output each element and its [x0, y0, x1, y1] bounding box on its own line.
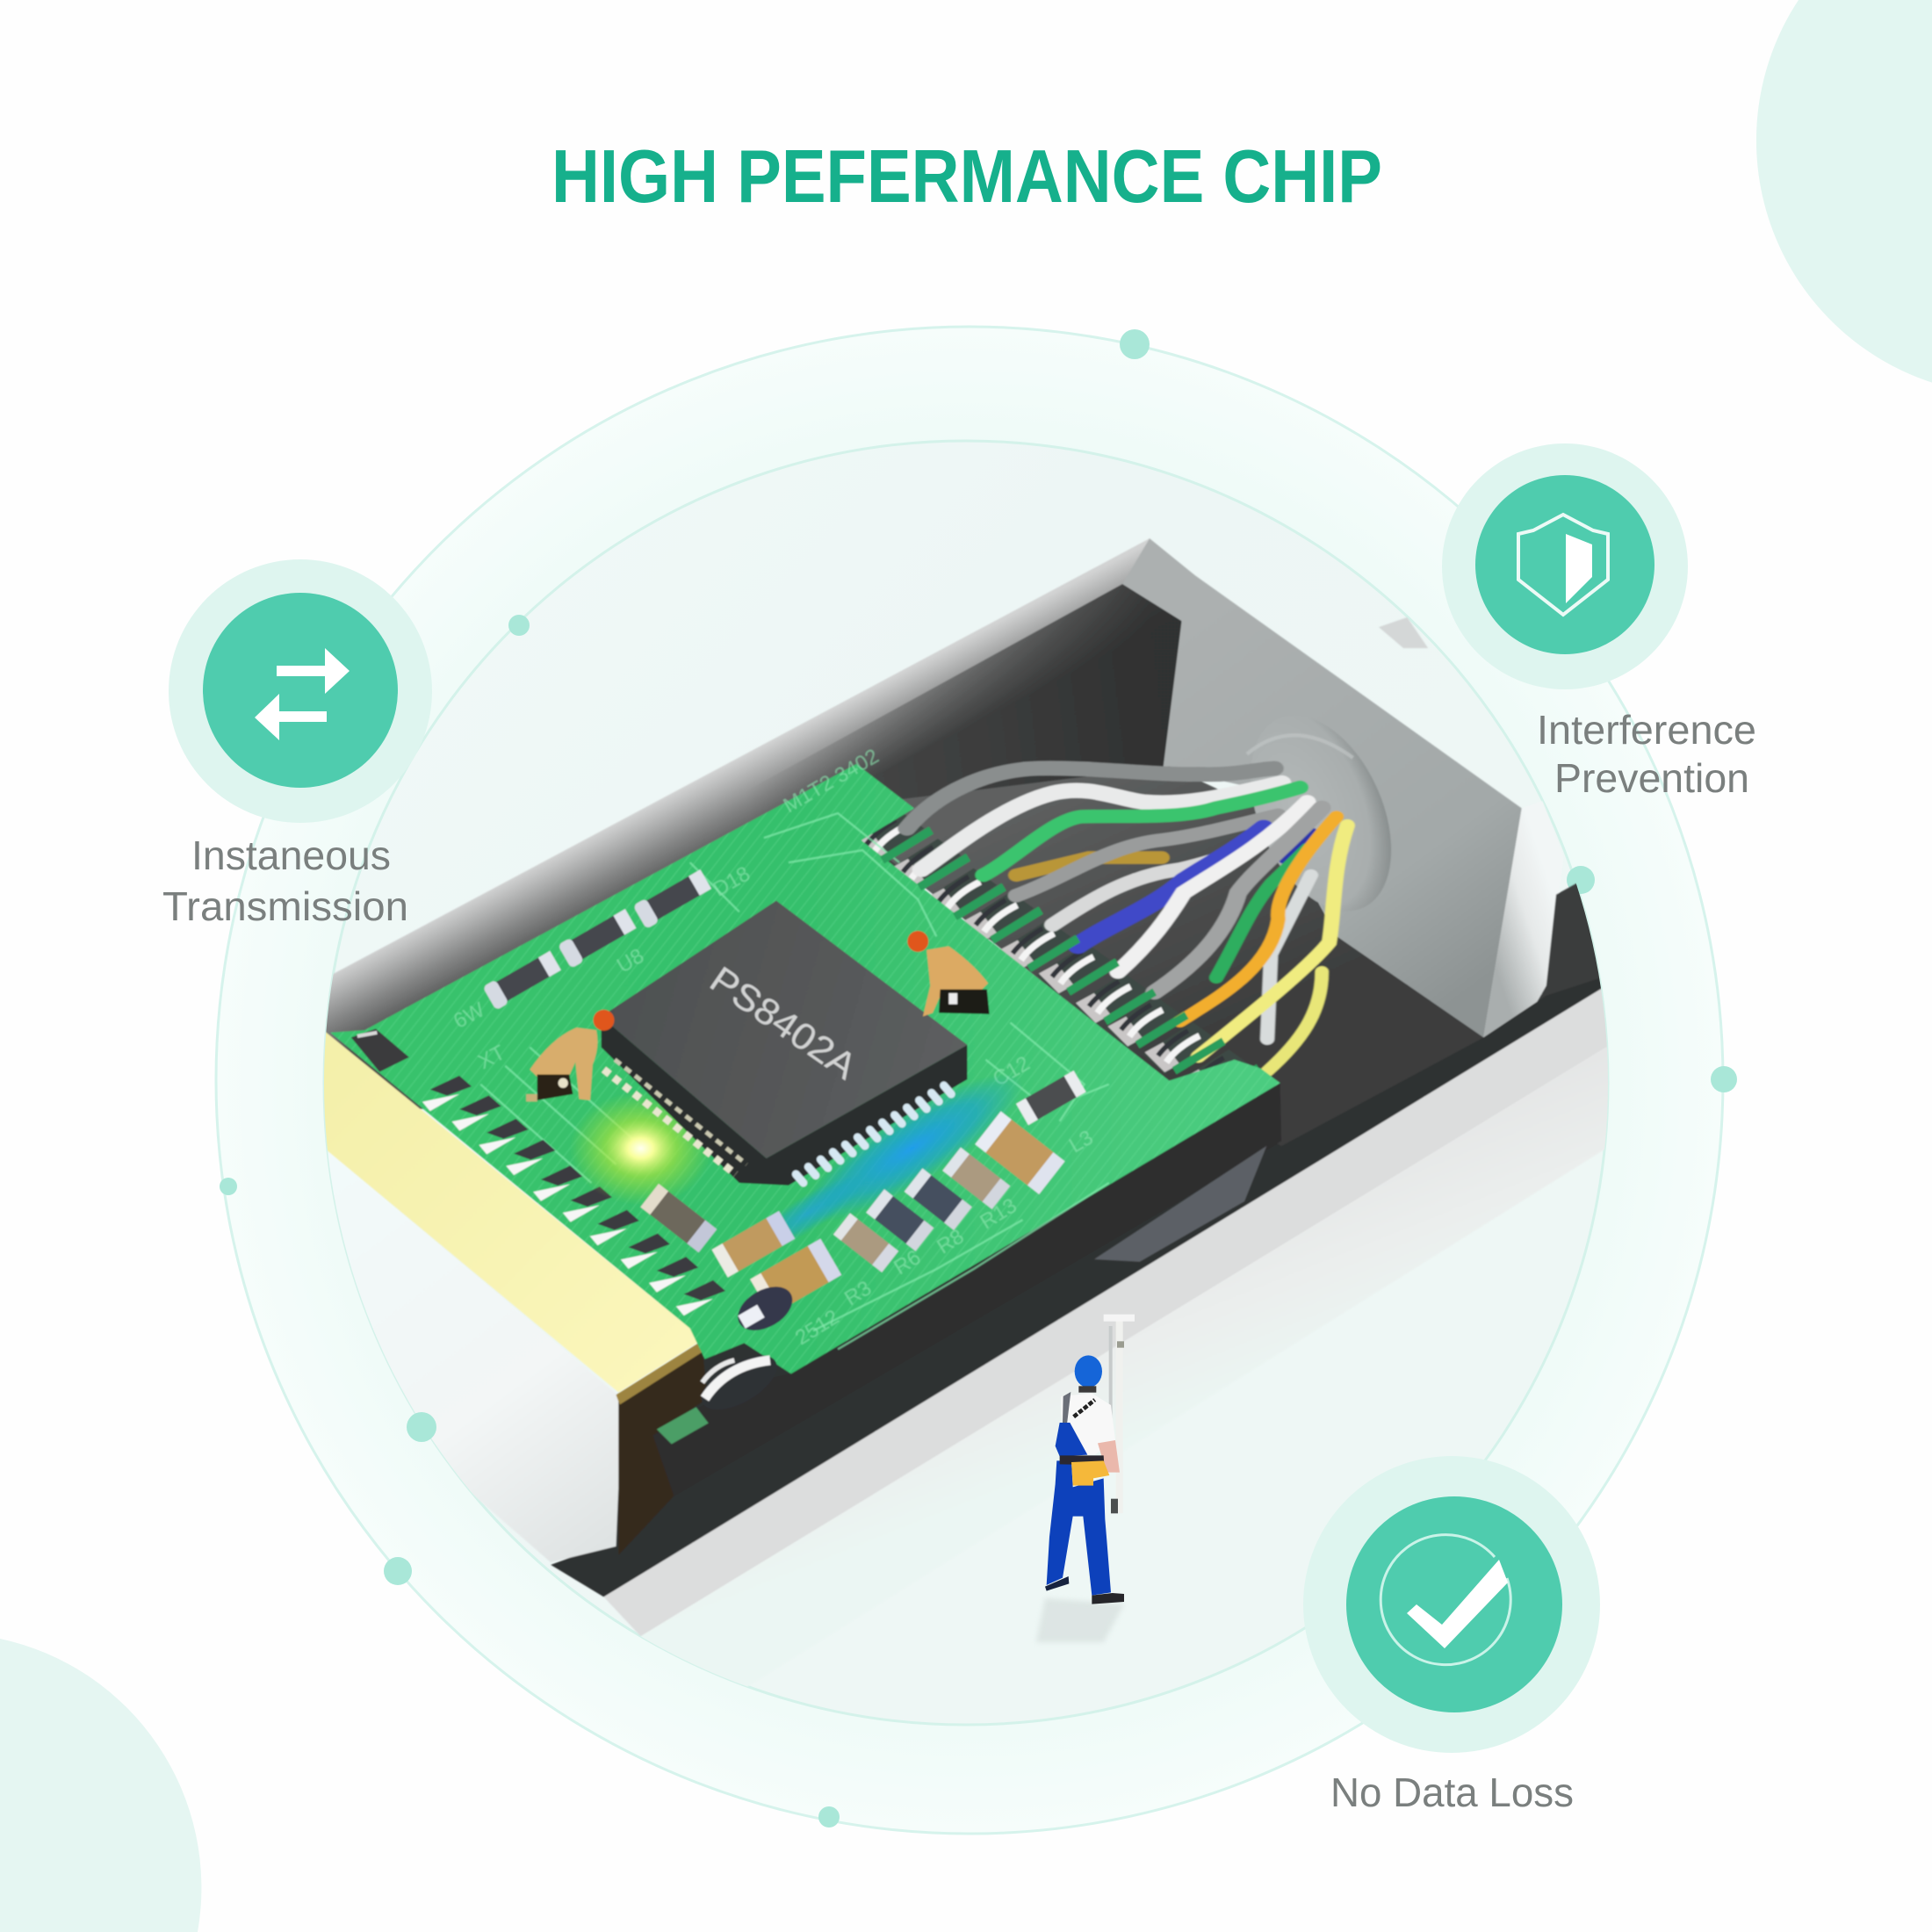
wall darkening towards corner: [782, 583, 1182, 864]
trousers: [1047, 1460, 1111, 1596]
yellow wire one: [1198, 825, 1347, 1056]
glow: blue current: [740, 1050, 1040, 1265]
bottom corner pad: [693, 1344, 785, 1421]
chip marking: PS8402A: [703, 958, 864, 1087]
green wire: [984, 788, 1300, 876]
top row of resistors: [483, 868, 712, 1011]
pcb silkscreen labels: L3: [1065, 1126, 1097, 1157]
pcb silkscreen labels: R6: [890, 1245, 925, 1280]
chip body sides: [602, 1017, 967, 1186]
ring dots over product: [384, 1412, 436, 1585]
decorative circle: top right: [1756, 0, 1932, 383]
pcb silkscreen labels: XT: [474, 1041, 509, 1074]
label: No Data Loss: [1330, 1770, 1574, 1815]
belt: [1060, 1455, 1104, 1465]
tool pouch: [1071, 1460, 1109, 1486]
roller pole: [1104, 1315, 1135, 1513]
right resistor: [1016, 1071, 1086, 1125]
second green wire: [1216, 849, 1308, 977]
recess beneath the wires: [862, 767, 1483, 1146]
blue wire: [1078, 828, 1264, 946]
navy wire: [1286, 834, 1311, 858]
gold edge: [616, 1341, 705, 1404]
decorative circle: bottom left: [0, 1639, 201, 1932]
third grey wire: [1155, 808, 1322, 992]
right worker: [907, 931, 990, 1017]
top-left corner pad: [351, 1029, 409, 1072]
lid front face: [641, 1042, 1614, 1715]
label: Prevention: [1554, 755, 1749, 801]
icon disc: [1346, 1496, 1562, 1712]
arm: [1098, 1440, 1120, 1473]
cable grommet: [1246, 731, 1391, 908]
yellow wire two: [1267, 972, 1322, 1071]
pcb traces: [480, 813, 1109, 1349]
shirt: [1061, 1394, 1115, 1455]
lid top band: [603, 981, 1614, 1636]
brown connector end wall: [618, 1347, 707, 1555]
pcb silkscreen labels: R13: [976, 1193, 1021, 1234]
product: cutaway connector housing: [314, 538, 1614, 1715]
white box end at lower left: [314, 1140, 623, 1562]
gold contact plate: [314, 1023, 705, 1392]
feature: No Data Loss: [1303, 1456, 1600, 1815]
rear gold wire: [1016, 858, 1162, 876]
helmet: [1075, 1355, 1102, 1388]
pcb corner tab: [657, 1407, 709, 1444]
green strip over rear pads: [883, 831, 1223, 1071]
wires from pads to grommet: [907, 768, 1347, 1071]
white wire: [921, 783, 1282, 869]
white wire front: [1118, 802, 1308, 972]
grey patch on end top: [1379, 617, 1428, 648]
bottom capacitors and resistors: [640, 1111, 1065, 1339]
icon: shield: [1518, 515, 1608, 615]
pcb silkscreen labels: 6W: [450, 998, 489, 1034]
chip top face: [602, 901, 967, 1158]
icon halo: [1442, 443, 1688, 689]
housing back wall with rim: [318, 538, 1182, 1109]
chip left pins: [603, 1060, 746, 1174]
left worker: [526, 1010, 614, 1101]
light grey wire: [1267, 876, 1311, 1039]
label: Interference: [1537, 707, 1756, 753]
ring dots: [220, 329, 1737, 1827]
second grey wire: [1016, 815, 1279, 896]
housing floor: [550, 978, 1602, 1598]
glow: yellow spark: [569, 1092, 712, 1205]
outer ring disc: [216, 327, 1723, 1834]
printed circuit board: [330, 745, 1280, 1373]
feature: Instaneous Transmission: [162, 559, 432, 929]
pcb silkscreen labels: C12: [989, 1051, 1034, 1092]
label: Instaneous: [191, 833, 391, 878]
end wall light face: [1483, 801, 1563, 1037]
pcb silkscreen labels: U8: [613, 944, 648, 978]
pcb silkscreen labels: R8: [933, 1224, 968, 1258]
left shoe: [1045, 1576, 1069, 1591]
orange wire: [1180, 817, 1337, 1021]
icon disc: [1475, 475, 1654, 654]
reflection beneath pcb: [1094, 1146, 1266, 1262]
right shoe: [1092, 1593, 1124, 1604]
straps: [1063, 1392, 1095, 1424]
neck: [1078, 1386, 1096, 1393]
pcb silkscreen labels: D18: [709, 861, 754, 902]
pcb dark side wall: [1228, 1084, 1281, 1143]
icon: transfer arrows: [255, 648, 350, 740]
grey wire: [907, 768, 1274, 828]
rear connector solder pads: [861, 814, 1259, 1075]
chip PS8402A: [602, 901, 967, 1186]
housing end wall: [1122, 538, 1522, 1037]
pcb silkscreen labels: 2512: [791, 1305, 843, 1350]
third white wire: [1053, 849, 1242, 925]
chip right pins: [796, 1085, 951, 1183]
inner disc: [324, 441, 1608, 1725]
icon disc: [203, 593, 398, 788]
label: Transmission: [162, 883, 408, 929]
overalls bib: [1056, 1423, 1087, 1456]
pcb silkscreen labels: R3: [840, 1276, 876, 1310]
icon: check mark in ring: [1381, 1535, 1510, 1665]
icon halo: [1303, 1456, 1600, 1753]
pcb silkscreen labels: [450, 745, 1097, 1350]
title: HIGH PEFERMANCE CHIP: [551, 135, 1382, 219]
pcb silkscreen labels: M1T2 3402: [779, 745, 883, 818]
edge connector solder pads: [422, 1076, 725, 1316]
feature: Interference Prevention: [1442, 443, 1756, 801]
worker reflection: [1036, 1598, 1124, 1642]
black side wall at right: [1537, 883, 1600, 1003]
worker in blue overalls with roller: [1036, 1315, 1135, 1642]
icon halo: [169, 559, 432, 823]
